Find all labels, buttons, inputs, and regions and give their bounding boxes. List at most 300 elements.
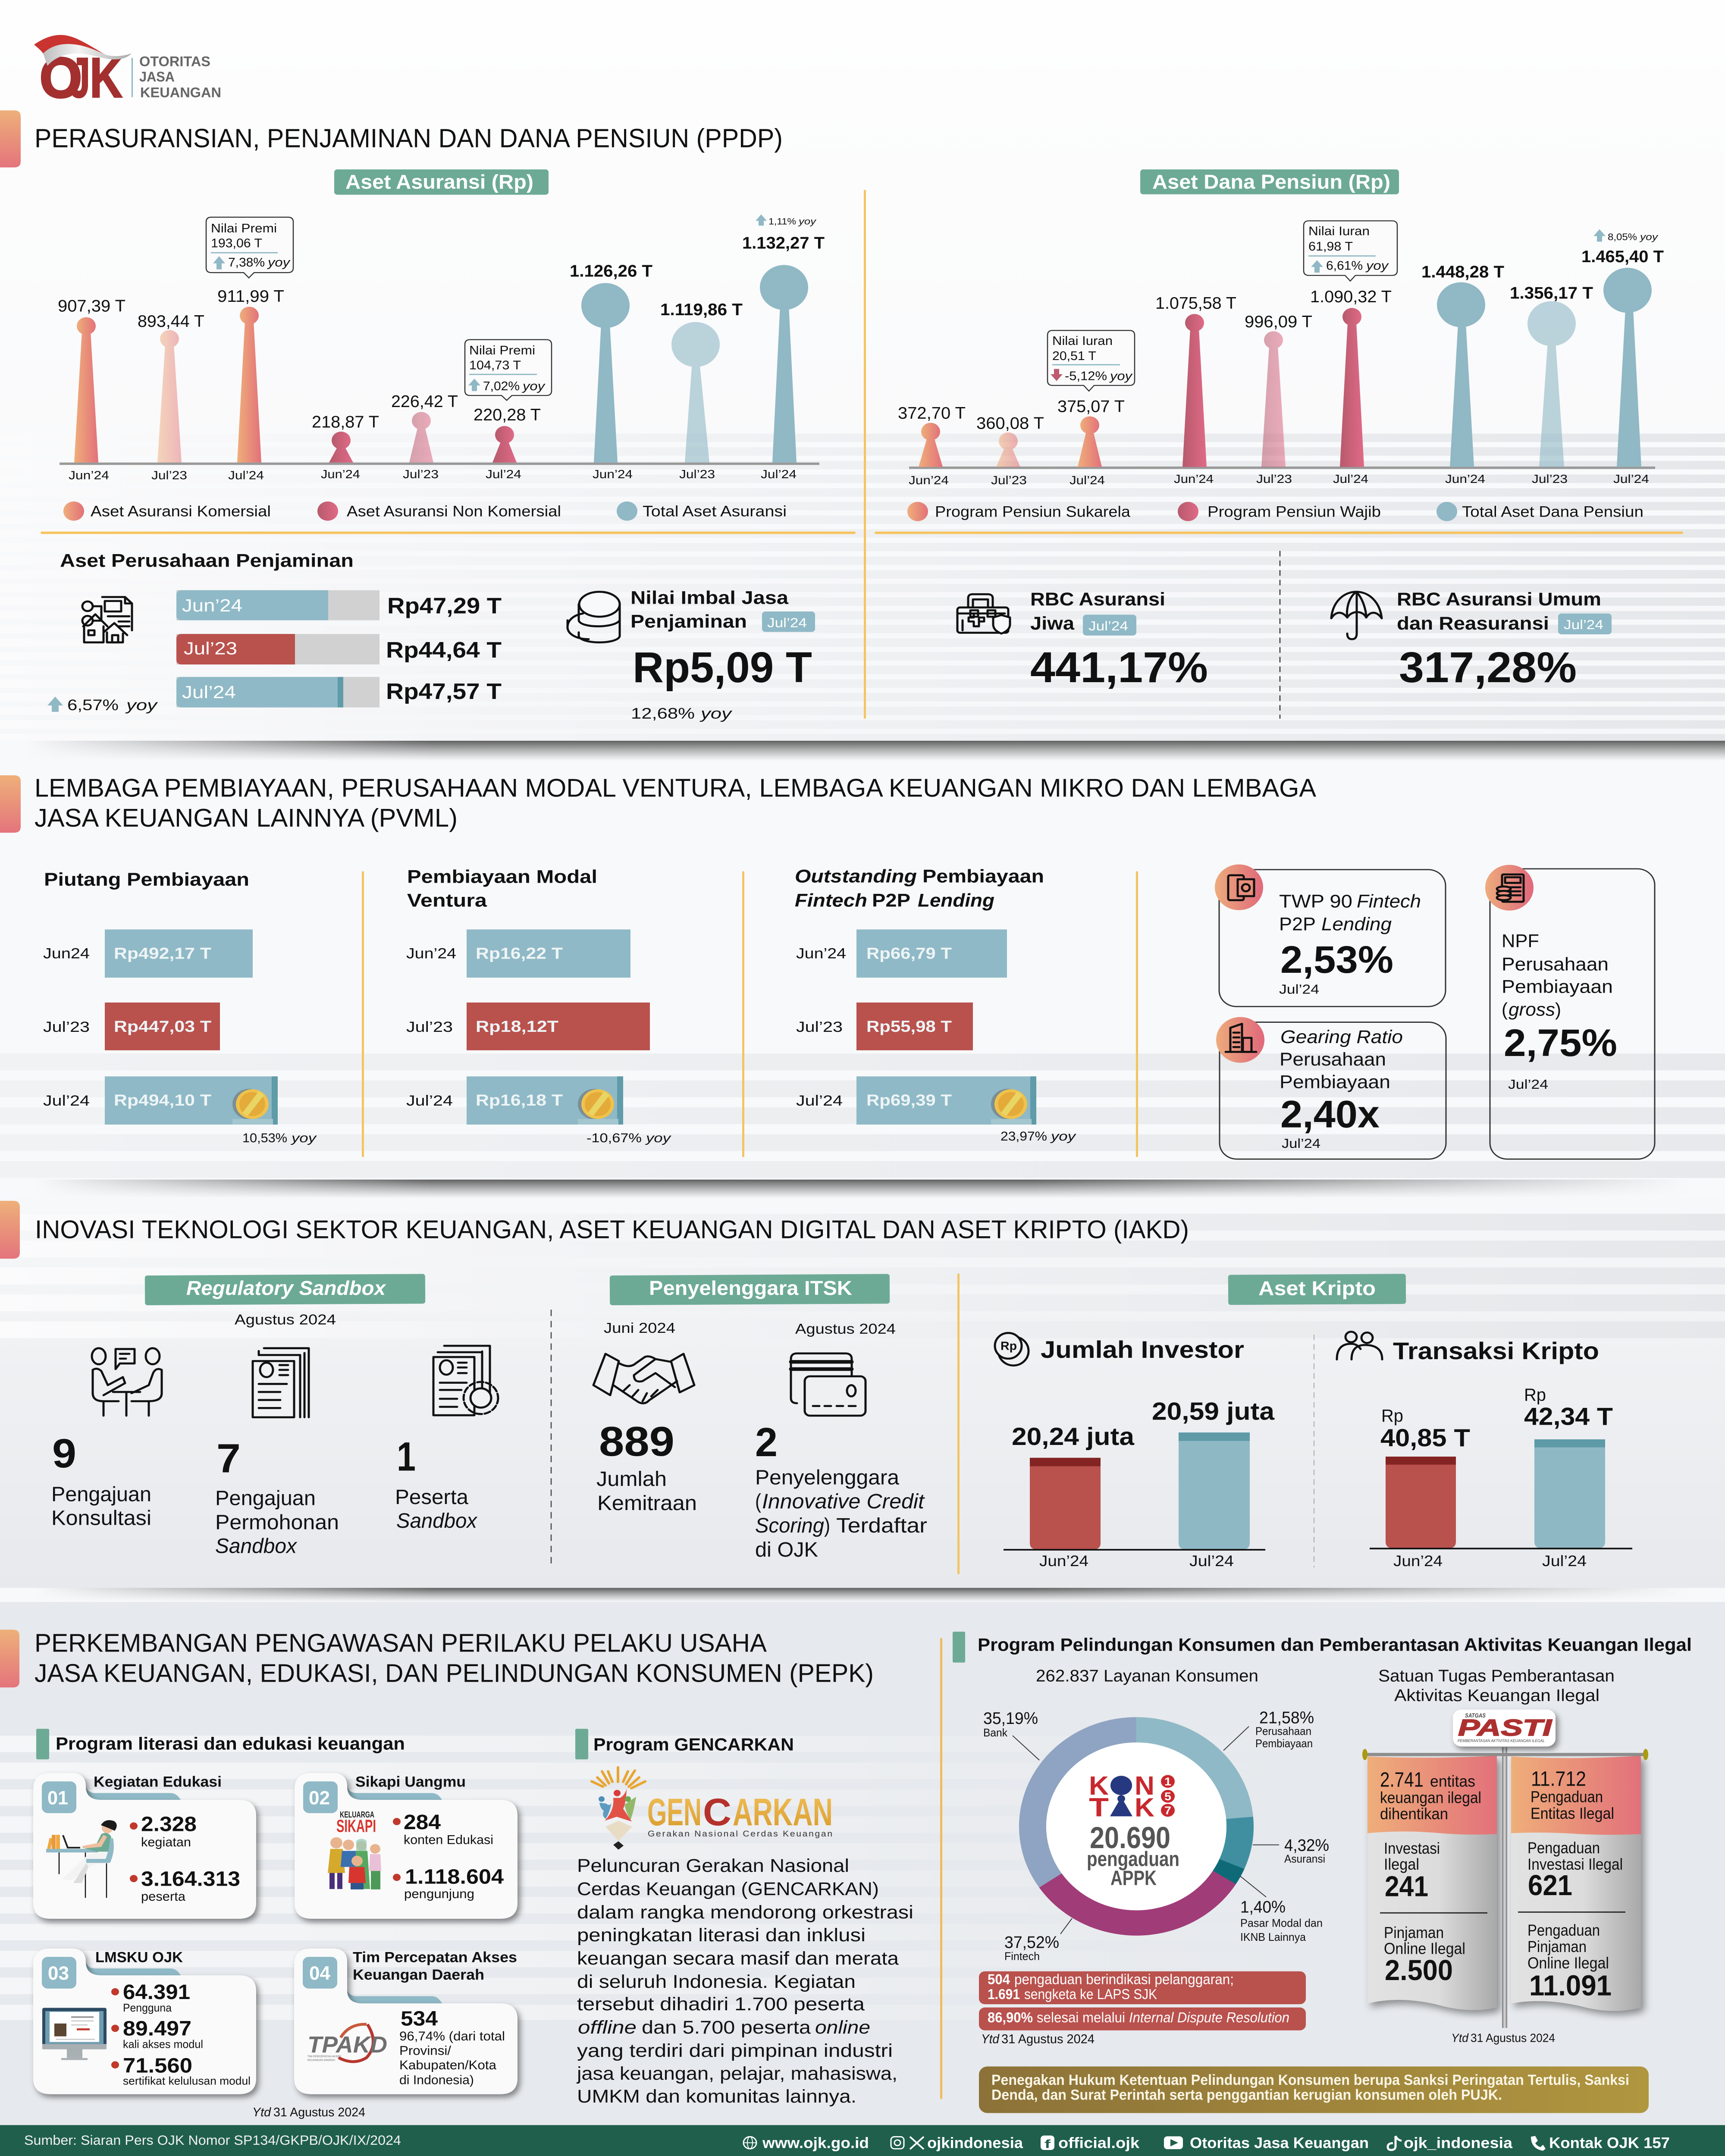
value labels: 1.132,27 T xyxy=(742,233,825,252)
text: left banner: 2.500 xyxy=(1385,1954,1453,1987)
callout: nilai iuran sukarela xyxy=(1048,330,1135,391)
logo: kontak 157: N xyxy=(1135,1771,1154,1801)
value labels: 911,99 T xyxy=(217,287,284,306)
section 3 marker xyxy=(0,1201,20,1259)
stats xyxy=(51,1430,478,1557)
donut label: perusahaan pembiayaan xyxy=(1223,1708,1314,1751)
donut label: asuransi xyxy=(1253,1836,1329,1865)
card 03: LMSKU OJK xyxy=(33,1949,256,2094)
yoy xyxy=(631,705,733,722)
labels: Jun’24 xyxy=(796,945,846,962)
contact: phone: Kontak OJK 157 xyxy=(1549,2134,1670,2151)
callout: nilai premi non komersial xyxy=(465,340,552,400)
stats: di Indonesia) xyxy=(399,2072,474,2087)
contact: website: www.ojk.go.id xyxy=(762,2134,869,2151)
logo: TPAKD: TIM PERCEPATAN AKSES xyxy=(307,2055,341,2058)
card 04: tim percepatan akses keuangan daerah: 04 xyxy=(309,1962,330,1984)
card: NPF: NPF xyxy=(1502,931,1539,951)
bars: Rp492,17 T xyxy=(114,945,211,962)
x labels: Jul’23 xyxy=(991,474,1027,487)
stats: Kabupaten/Kota xyxy=(399,2058,497,2072)
logo: gencarkan: Gerakan Nasional Cerdas Keuangan xyxy=(648,1829,832,1839)
yoy: 23,97% xyxy=(1000,1129,1047,1144)
paragraph: di seluruh Indonesia. Kegiatan xyxy=(577,1971,856,1992)
bars: Rp447,03 T xyxy=(114,1018,211,1036)
yoy xyxy=(586,1131,671,1145)
pill xyxy=(145,1274,425,1305)
text: left banner: Ilegal xyxy=(1384,1855,1419,1874)
paragraph: jasa keuangan, pelajar, mahasiswa, xyxy=(576,2064,897,2084)
bars xyxy=(856,929,1036,1125)
panel: piutang pembiayaan xyxy=(43,869,317,1145)
heading: RBC Asuransi Umum xyxy=(1397,589,1601,610)
pins: wajib xyxy=(1182,308,1364,467)
card 03: LMSKU OJK: LMSKU OJK xyxy=(95,1949,183,1965)
card 02: sikapi uangmu xyxy=(295,1773,518,1919)
heading: program literasi: Program literasi dan edukasi keuangan xyxy=(56,1734,405,1754)
yoy: total dana pensiun: yoy xyxy=(1639,232,1659,242)
bars xyxy=(467,929,650,1125)
logo: satgas pasti: SATGAS xyxy=(1465,1713,1486,1719)
panel: pembiayaan modal ventura xyxy=(406,867,671,1145)
heading: transaksi kripto: Transaksi Kripto xyxy=(1393,1338,1599,1364)
card 03: LMSKU OJK: 03 xyxy=(48,1962,69,1984)
value labels: 226,42 T xyxy=(391,392,458,411)
text: right banner: Entitas Ilegal xyxy=(1531,1805,1614,1823)
panel: RBC asuransi umum dan reasuransi xyxy=(1331,589,1612,692)
values: Rp44,64 T xyxy=(386,638,502,663)
red box: pengaduan: pengaduan berindikasi pelanggaran; xyxy=(1014,1972,1234,1987)
donut label: asuransi: 4,32% xyxy=(1284,1836,1329,1855)
paragraph: tersebut dihadiri 1.700 peserta xyxy=(577,1994,865,2015)
axis line xyxy=(60,463,819,465)
x labels: Jul’24 xyxy=(228,469,264,482)
badge: Jul’24 xyxy=(1088,618,1128,633)
yoy: total aset asuransi: 1,11% xyxy=(768,216,796,226)
section 2 title: LEMBAGA PEMBIAYAAN, PERUSAHAAN MODAL VENTURA, LEMBAGA KEUANGAN MIKRO DAN LEMBAGA xyxy=(34,774,1317,802)
callout: nilai premi komersial: 193,06 T xyxy=(211,237,262,250)
yoy: yoy xyxy=(291,1131,317,1145)
logo: TPAKD xyxy=(307,2024,387,2062)
panel: RBC asuransi jiwa: Jiwa xyxy=(1030,613,1074,634)
stats: ( xyxy=(755,1490,761,1513)
x labels: Jul’24 xyxy=(1333,473,1368,486)
callout: nilai iuran wajib: Nilai Iuran xyxy=(1308,225,1370,238)
yoy: yoy xyxy=(125,696,158,714)
panel: layanan konsumen xyxy=(979,1666,1329,2046)
logo: kontak 157: 1 xyxy=(1164,1775,1171,1788)
x labels xyxy=(69,468,797,482)
section 4 title xyxy=(34,1629,874,1688)
legend xyxy=(63,501,787,521)
logo: OJK: O xyxy=(40,46,82,109)
yoy xyxy=(1000,1129,1076,1144)
bar: Jun'24 xyxy=(176,590,380,620)
pins: total xyxy=(1437,268,1652,467)
bar: Jul'23: Jul’23 xyxy=(184,639,237,658)
illustration: person at desk xyxy=(46,1820,117,1898)
logo: kontak 157: T xyxy=(1089,1792,1109,1822)
pill xyxy=(1228,1274,1406,1305)
bars: Rp494,10 T xyxy=(114,1091,211,1109)
stats: 71.560 xyxy=(123,2054,192,2077)
yoy: 6,57% xyxy=(67,696,119,714)
panel: aset perusahaan penjaminan xyxy=(47,551,502,714)
x labels: Jun’24 xyxy=(593,468,633,481)
callout: nilai iuran wajib xyxy=(1304,221,1397,281)
yoy: total dana pensiun xyxy=(1593,229,1659,242)
heading xyxy=(795,866,1044,911)
card: NPF xyxy=(1485,865,1655,1159)
note: ytd: Ytd xyxy=(981,2031,1000,2046)
text: right banner: Pengaduan xyxy=(1527,1839,1600,1857)
panel: aset kripto xyxy=(995,1274,1406,1570)
panel: regulatory sandbox xyxy=(51,1274,498,1557)
stats: di OJK xyxy=(755,1538,818,1561)
card: NPF: ( xyxy=(1502,1000,1508,1020)
panel: penyelenggara ITSK: Agustus 2024 xyxy=(795,1321,896,1337)
yoy: total dana pensiun: 8,05% xyxy=(1608,232,1637,242)
card: gearing ratio xyxy=(1216,1017,1446,1159)
stats: 64.391 xyxy=(123,1981,190,2004)
x labels: Jul’23 xyxy=(403,468,439,481)
x labels: Jun’24 xyxy=(69,469,109,482)
logo: OJK: J xyxy=(69,46,90,109)
pill: Aset Kripto xyxy=(1258,1277,1376,1300)
labels xyxy=(796,945,846,1109)
illustration: computer xyxy=(42,2008,107,2060)
donut label: fintech: 37,52% xyxy=(1004,1933,1059,1952)
stats xyxy=(393,1811,504,1901)
card: NPF: 2,75% xyxy=(1504,1021,1617,1064)
paragraph: dan 5.700 peserta xyxy=(642,2017,811,2038)
legend: Total Aset Asuransi xyxy=(643,503,787,520)
text: right banner: Pinjaman xyxy=(1527,1938,1587,1956)
heading: program pelindungan konsumen xyxy=(953,1632,1692,1663)
card: NPF: Pembiayaan xyxy=(1502,977,1613,997)
stats: 889 xyxy=(599,1418,674,1465)
logo: TPAKD: KEUANGAN DAERAH xyxy=(307,2059,335,2062)
illustration: keluarga sikapi: SIKAPI xyxy=(336,1817,376,1836)
heading: P2P xyxy=(872,890,910,911)
stats xyxy=(130,1812,240,1904)
value labels: 220,28 T xyxy=(474,405,541,424)
heading: Lending xyxy=(918,890,994,911)
logo: kontak 157: 5 xyxy=(1164,1790,1171,1803)
card: TWP 90: Fintech xyxy=(1357,891,1421,912)
stats: Permohonan xyxy=(215,1510,339,1534)
labels: Jul’23 xyxy=(406,1018,453,1035)
card: TWP 90: Jul’24 xyxy=(1279,982,1319,997)
logo: kontak 157 xyxy=(1089,1771,1175,1822)
contact: instagram x: ojkindonesia xyxy=(927,2134,1023,2151)
labels: Jul’24 xyxy=(406,1092,453,1109)
card: gearing ratio: Jul’24 xyxy=(1282,1136,1320,1151)
value labels: 893,44 T xyxy=(138,311,204,331)
legend: Program Pensiun Sukarela xyxy=(935,503,1131,520)
axis line xyxy=(909,467,1655,469)
bar: transaksi Jul'24 xyxy=(1534,1439,1605,1548)
legend xyxy=(907,502,1643,521)
stats: Sandbox xyxy=(215,1534,298,1557)
logo: kontak 157: K xyxy=(1135,1792,1154,1822)
investor values xyxy=(1012,1397,1275,1451)
heading: Piutang Pembiayaan xyxy=(44,869,249,890)
card: TWP 90: Lending xyxy=(1321,914,1392,934)
text: right banner: 621 xyxy=(1528,1869,1572,1901)
contact: tiktok: ojk_indonesia xyxy=(1404,2134,1513,2151)
banner: right xyxy=(1511,1756,1641,2011)
callout: nilai iuran sukarela: -5,12% xyxy=(1065,370,1107,383)
card: TWP 90 xyxy=(1215,865,1446,1006)
yoy xyxy=(242,1131,317,1145)
text: right banner: Investasi Ilegal xyxy=(1527,1855,1623,1874)
labels: Jun’24 xyxy=(406,945,456,962)
stats: 3.164.313 xyxy=(141,1867,240,1890)
donut label: pasar modal: Pasar Modal dan xyxy=(1240,1917,1323,1929)
donut label: fintech xyxy=(1004,1918,1072,1962)
yoy: yoy xyxy=(645,1131,671,1145)
stats: 2.328 xyxy=(141,1812,197,1836)
logo: kontak 157: 7 xyxy=(1164,1805,1171,1817)
heading: Ventura xyxy=(407,890,487,911)
badge xyxy=(1083,615,1136,636)
callout: nilai premi komersial: yoy xyxy=(267,256,291,270)
card 04: tim percepatan akses keuangan daerah: Tim Percepatan Akses xyxy=(353,1949,517,1965)
section 4 title: PERKEMBANGAN PENGAWASAN PERILAKU PELAKU USAHA xyxy=(34,1629,767,1658)
transaksi values: 42,34 T xyxy=(1524,1402,1613,1430)
panel: transaksi kripto xyxy=(1337,1332,1632,1570)
icon: building xyxy=(1216,1017,1264,1063)
callout: nilai premi komersial: 7,38% xyxy=(228,256,265,270)
logo: kontak 157: K xyxy=(1089,1771,1109,1801)
icon: rupiah coins: Rp xyxy=(1000,1339,1017,1353)
pins: sukarela xyxy=(919,417,1102,467)
bar: investor Jul'24 xyxy=(1179,1432,1250,1549)
text: left banner: Investasi xyxy=(1384,1839,1440,1858)
paragraph: dalam rangka mendorong orkestrasi xyxy=(577,1902,913,1922)
callout: nilai iuran sukarela: 20,51 T xyxy=(1052,349,1096,363)
stats: 9 xyxy=(52,1430,76,1476)
x labels: Jun’24 xyxy=(909,474,949,487)
value labels: 372,70 T xyxy=(898,403,966,423)
text: right banner: 11.712 xyxy=(1531,1767,1586,1790)
stats: 284 xyxy=(404,1811,441,1834)
bars: Rp16,18 T xyxy=(476,1091,563,1109)
date: Agustus 2024 xyxy=(235,1312,336,1328)
x labels: Jun’24 xyxy=(321,468,360,481)
heading: Program GENCARKAN xyxy=(593,1735,794,1755)
text: left banner: entitas xyxy=(1430,1773,1475,1790)
panel: aset dana pensiun chart xyxy=(898,169,1664,521)
transaksi values: Rp xyxy=(1381,1406,1403,1426)
callout: nilai premi non komersial: yoy xyxy=(522,379,546,393)
donut label: pasar modal: 1,40% xyxy=(1240,1897,1286,1916)
badge xyxy=(762,611,815,632)
red box: idr xyxy=(979,2007,1306,2031)
x labels: Jul’24 xyxy=(761,468,797,481)
note: ytd: Ytd xyxy=(252,2106,271,2119)
stats: Penyelenggara xyxy=(755,1466,899,1489)
x labels: Jul’23 xyxy=(151,469,187,482)
section 2 title: JASA KEUANGAN LAINNYA (PVML) xyxy=(34,804,458,833)
stats: Pengguna xyxy=(123,2002,172,2014)
red box: pengaduan: 1.691 xyxy=(988,1987,1020,2002)
value labels: 1.356,17 T xyxy=(1510,283,1593,302)
stats: Pengajuan xyxy=(215,1486,316,1510)
callout: nilai iuran sukarela: yoy xyxy=(1109,370,1133,383)
icon: documents xyxy=(253,1348,309,1417)
banner: left xyxy=(1367,1756,1497,2010)
donut center text: 20.690 xyxy=(1090,1821,1170,1855)
bar: investor Jun'24 xyxy=(1030,1458,1101,1549)
values xyxy=(386,593,502,704)
logo: satgas pasti: PASTI xyxy=(1458,1714,1552,1741)
badge: Jul’24 xyxy=(1564,617,1603,632)
value labels: 218,87 T xyxy=(312,412,379,431)
transaksi values: 40,85 T xyxy=(1380,1424,1470,1451)
icon: people xyxy=(1337,1332,1382,1360)
logo: OJK: KEUANGAN xyxy=(140,85,221,100)
logo: gencarkan: C xyxy=(703,1790,731,1833)
stats: kegiatan xyxy=(141,1835,191,1849)
logo: satgas pasti: PEMBERANTASAN AKTIVITAS KEUANGAN ILEGAL xyxy=(1458,1739,1545,1743)
text: right banner: Pengaduan xyxy=(1527,1921,1600,1939)
card: gearing ratio: Gearing Ratio xyxy=(1280,1027,1403,1047)
donut label: pasar modal xyxy=(1240,1876,1323,1943)
stats: Pengajuan xyxy=(51,1482,151,1506)
red box: idr: Internal Dispute Resolution xyxy=(1129,2010,1289,2026)
icon: medical bag xyxy=(957,594,1010,633)
pins: komersial xyxy=(74,307,261,463)
heading: Aset Perusahaan Penjaminan xyxy=(60,551,354,571)
yoy: total aset asuransi xyxy=(756,214,817,226)
card 01: kegiatan edukasi: Kegiatan Edukasi xyxy=(94,1774,222,1790)
donut chart xyxy=(992,1692,1280,1960)
text: left banner: keuangan ilegal xyxy=(1380,1789,1481,1807)
legend: Aset Asuransi Non Komersial xyxy=(347,503,561,520)
donut label: bank: Bank xyxy=(983,1727,1007,1739)
card: gearing ratio: Pembiayaan xyxy=(1280,1072,1390,1092)
icon: coin xyxy=(578,1089,618,1125)
callout: nilai iuran wajib: 61,98 T xyxy=(1308,240,1353,254)
heading: Fintech xyxy=(795,890,867,911)
pill: Regulatory Sandbox xyxy=(186,1277,386,1299)
logo: OJK: OTORITAS xyxy=(139,54,210,69)
donut label: bank: 35,19% xyxy=(983,1708,1038,1728)
x labels: Jul’23 xyxy=(1256,473,1292,486)
callout: nilai iuran wajib: yoy xyxy=(1365,259,1389,273)
investor values: 20,59 juta xyxy=(1152,1397,1275,1425)
transaksi x labels: Jul’24 xyxy=(1542,1552,1587,1570)
labels: Jul’23 xyxy=(43,1018,90,1035)
value labels: 1.126,26 T xyxy=(570,261,652,280)
stats: Terdaftar xyxy=(836,1514,927,1537)
bar: Jul'24: Jul’24 xyxy=(182,683,236,702)
section 4 title: JASA KEUANGAN, EDUKASI, DAN PELINDUNGAN KONSUMEN (PEPK) xyxy=(34,1659,874,1688)
transaksi values xyxy=(1380,1385,1613,1451)
paragraph: keuangan secara masif dan merata xyxy=(577,1948,899,1969)
bar: Jul'24 xyxy=(176,677,380,708)
x labels: Jul’23 xyxy=(679,468,715,481)
x labels: Jun’24 xyxy=(1445,473,1485,486)
stats: 96,74% (dari total xyxy=(399,2029,505,2043)
yoy: 10,53% xyxy=(242,1131,287,1145)
logo: gencarkan: GEN xyxy=(647,1790,702,1833)
callout: nilai premi non komersial: Nilai Premi xyxy=(469,344,535,357)
value labels xyxy=(58,233,825,431)
section 1 marker xyxy=(0,110,21,167)
heading: RBC Asuransi xyxy=(1030,589,1165,610)
donut center text: pengaduan xyxy=(1087,1847,1179,1871)
callout: nilai premi komersial: Nilai Premi xyxy=(211,222,277,235)
value: 441,17% xyxy=(1030,643,1208,692)
x labels: Jul’23 xyxy=(1532,473,1568,486)
text: left banner: dihentikan xyxy=(1380,1805,1448,1823)
card: TWP 90: TWP 90 xyxy=(1279,891,1352,912)
stats xyxy=(399,2007,505,2087)
icon: phone money xyxy=(1215,865,1263,910)
card: gearing ratio: Perusahaan xyxy=(1280,1050,1386,1070)
panel: RBC asuransi jiwa xyxy=(957,589,1208,692)
panel: nilai imbal jasa penjaminan xyxy=(568,588,815,722)
callout: nilai iuran sukarela: Nilai Iuran xyxy=(1052,334,1113,348)
icon: rupiah coins xyxy=(995,1333,1029,1366)
stats: Innovative Credit xyxy=(762,1490,925,1513)
icon: coins xyxy=(568,592,620,642)
investor values: 20,24 juta xyxy=(1012,1423,1135,1451)
dates: Juni 2024 xyxy=(604,1320,675,1336)
red box: idr: selesai melalui xyxy=(1037,2010,1125,2026)
heading: Outstanding xyxy=(795,866,917,887)
stats: 1.118.604 xyxy=(405,1865,504,1888)
stats: 7 xyxy=(216,1435,241,1481)
pill: aset dana pensiun: Aset Dana Pensiun (Rp) xyxy=(1152,171,1390,193)
donut label: fintech: Fintech xyxy=(1004,1950,1040,1962)
icon: umbrella xyxy=(1331,592,1382,639)
card 02: sikapi uangmu: Sikapi Uangmu xyxy=(355,1774,466,1790)
values: Rp47,29 T xyxy=(387,593,502,618)
pill: aset asuransi: Aset Asuransi (Rp) xyxy=(345,171,533,193)
x labels: Jul’24 xyxy=(1613,473,1649,486)
text: right banner: 11.091 xyxy=(1529,1969,1612,2002)
section 4 marker xyxy=(0,1630,19,1687)
yoy: yoy xyxy=(1050,1129,1076,1144)
heading xyxy=(407,867,597,911)
icon: calculator coins xyxy=(1485,865,1534,911)
donut center text xyxy=(1087,1821,1179,1890)
value: 317,28% xyxy=(1399,643,1577,692)
section 3 title: INOVASI TEKNOLOGI SEKTOR KEUANGAN, ASET KEUANGAN DIGITAL DAN ASET KRIPTO (IAKD) xyxy=(35,1216,1189,1244)
text: left banner: Pinjaman xyxy=(1384,1924,1444,1942)
text: left banner: Online Ilegal xyxy=(1384,1940,1465,1958)
badge: Jul’24 xyxy=(767,615,807,630)
heading: program literasi xyxy=(36,1729,405,1759)
stats: 2 xyxy=(755,1419,778,1465)
investor x labels xyxy=(1039,1552,1234,1570)
donut label: pasar modal: IKNB Lainnya xyxy=(1240,1931,1306,1943)
callout: nilai premi non komersial: 104,73 T xyxy=(469,359,521,372)
bars: Rp66,79 T xyxy=(866,945,952,962)
card: NPF: Jul’24 xyxy=(1508,1077,1548,1092)
pill: Penyelenggara ITSK xyxy=(649,1277,852,1299)
pole xyxy=(1362,1747,1648,2028)
yoy: -10,67% xyxy=(586,1131,642,1145)
labels: Jul’24 xyxy=(796,1092,843,1109)
heading: Satuan Tugas Pemberantasan xyxy=(1378,1666,1615,1685)
panel: aset asuransi chart xyxy=(58,169,825,521)
card: TWP 90: P2P xyxy=(1279,914,1316,934)
